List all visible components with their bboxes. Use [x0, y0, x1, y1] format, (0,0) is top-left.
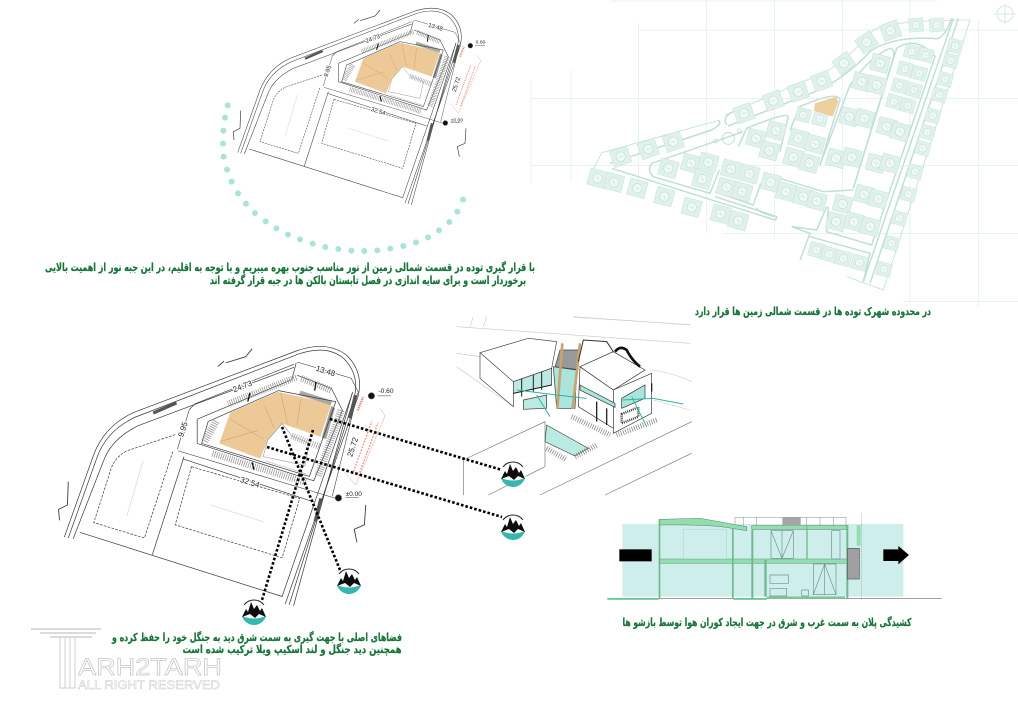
- dimensions: -0.60: [378, 388, 394, 395]
- caption: orientation and sunlight: [45, 261, 535, 287]
- dimensions: 32.54: [370, 107, 387, 117]
- caption: views: فضاهای اصلی با جهت گیری به سمت شرق دید به جنگل خود را حفظ کرده و: [111, 631, 402, 644]
- walls: [659, 520, 848, 598]
- bottom site plan with views: [59, 346, 394, 606]
- red annotation: [450, 47, 481, 113]
- top site plan with sun path: [220, 8, 486, 254]
- dimensions: 9.95: [324, 64, 333, 78]
- arrow: outgoing wind: [883, 546, 909, 564]
- paving hatch: [547, 417, 657, 460]
- icon: forest view 3: [336, 568, 362, 594]
- watermark logo: ARH2TARH: [78, 654, 222, 681]
- plan fills: [355, 42, 443, 98]
- left wing glazing: [513, 368, 552, 409]
- windows and furniture: [683, 529, 840, 596]
- grid lines: [530, 0, 1018, 324]
- caption: orientation and sunlight: برخوردار است و برای سایه اندازی در فصل تابستان بالکن ها در جبه قرار گرفته اند: [210, 274, 526, 287]
- highlighted project plot: [814, 97, 838, 117]
- site context lines: [457, 317, 692, 410]
- roof railing: [735, 517, 846, 526]
- caption: orientation and sunlight: با قرار گیری توده در قسمت شمالی زمین از نور مناسب جنوب بهره میبریم و با توجه به اقلیم، در این جبه نور از اهمیت بالایی: [45, 261, 535, 274]
- dimensions: 32.54: [239, 475, 261, 490]
- red annotation: [345, 397, 385, 485]
- right wing: [578, 367, 613, 428]
- icon: north compass: [994, 3, 1016, 25]
- dimensions: ±0.00: [451, 117, 463, 123]
- icon: forest view 1: [500, 462, 526, 487]
- section with cross ventilation: [607, 513, 942, 600]
- arrow: incoming wind: [619, 549, 652, 561]
- dimensions: [324, 23, 486, 123]
- axonometric view of the villa: [457, 317, 692, 495]
- building lots: [587, 18, 964, 278]
- dimensions: 24.73: [232, 379, 254, 394]
- dimensions: 9.95: [176, 420, 190, 438]
- dimensions: 13.48: [427, 23, 444, 33]
- air flow lines: [517, 390, 683, 427]
- ground line: [607, 597, 942, 599]
- icon: forest view 2: [500, 514, 526, 540]
- stair: [847, 548, 859, 579]
- watermark logo: [31, 629, 222, 692]
- central glass tower: [553, 367, 577, 408]
- plan linework: [59, 346, 391, 606]
- caption: views: [111, 631, 402, 656]
- site map panel: [530, 0, 1018, 324]
- swimming pool: [545, 425, 588, 456]
- dimensions: 24.73: [365, 34, 382, 45]
- roads: [587, 18, 970, 290]
- roof and floor slabs: [659, 518, 747, 531]
- air zone background: [622, 524, 903, 597]
- caption: views: همچنین دید جنگل و لند اسکیپ ویلا ترکیب شده است: [182, 643, 402, 656]
- dimensions: [176, 364, 394, 498]
- icon: forest view 4: [242, 600, 266, 625]
- watermark logo: ALL RIGHT RESERVED: [78, 678, 220, 692]
- sun path dots: [220, 102, 466, 254]
- plan fills: [219, 391, 335, 465]
- sight lines to forest views: [262, 419, 502, 600]
- dimensions: 25.72: [452, 76, 462, 93]
- dimensions: 25.72: [345, 436, 360, 458]
- dimensions: 13.48: [315, 364, 337, 378]
- dimensions: ±0.00: [345, 491, 362, 498]
- plan linework: [233, 8, 485, 205]
- dimensions: 0.60: [476, 40, 486, 46]
